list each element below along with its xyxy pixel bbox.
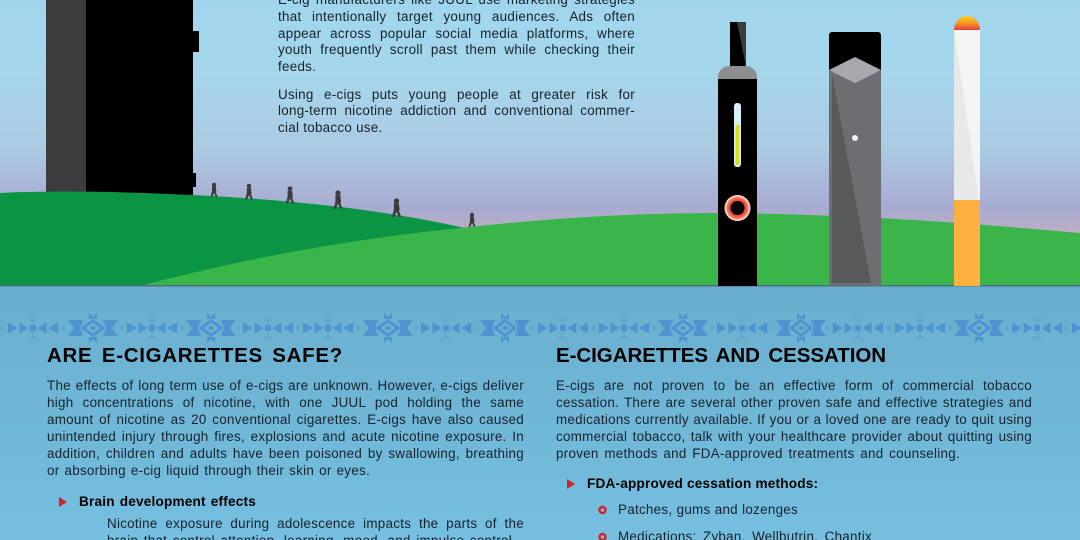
horizon line — [0, 285, 1080, 286]
text: The effects of long term use of e-cigs are unknown. However, e-cigs deliver — [47, 378, 524, 393]
list item: patches: Patches, gums and lozenges — [618, 502, 798, 517]
text: Using e-cigs puts young people at greater risk for — [278, 87, 635, 102]
decorative band pattern — [0, 313, 1080, 343]
icon: vape pen — [718, 22, 757, 286]
text: high concentrations of nicotine, with one JUUL pod holding the same — [47, 395, 524, 410]
text: addition, children and adults have been poisoned by swallowing, breathing — [47, 446, 524, 461]
tower: giant device silhouette — [46, 0, 199, 197]
heading: e-cigarettes and cessation: E-CIGARETTES AND CESSATION — [556, 344, 886, 367]
text: unintended injury through fires, explosions and acute nicotine exposure. In — [47, 429, 524, 444]
text: cial tobacco use. — [278, 120, 383, 135]
text block: marketing to youth — [278, 0, 635, 135]
bullet: patches ring — [600, 507, 606, 513]
hill: light green — [140, 213, 1080, 286]
icon: cigarette — [954, 16, 980, 286]
text: E-cigs are not proven to be an effective form of commercial tobacco — [556, 378, 1032, 393]
text: amount of nicotine as 20 conventional cigarettes. E-cigs have also caused — [47, 412, 524, 427]
text: that intentionally target young audiences. Ads often — [278, 9, 635, 24]
heading: are e-cigarettes safe: ARE E-CIGARETTES SAFE? — [47, 344, 343, 367]
walking figures — [210, 183, 476, 227]
text: proven methods and FDA-approved treatments and counseling. — [556, 446, 960, 461]
text: Nicotine exposure during adolescence impacts the parts of the — [107, 516, 524, 531]
sky — [0, 0, 1080, 240]
text: or absorbing e-cig liquid through their skin or eyes. — [47, 463, 370, 478]
lower panel background — [0, 286, 1080, 540]
text block: cessation paragraph — [556, 378, 1032, 461]
bullet: brain development arrow — [59, 497, 67, 507]
bullet: medications ring — [600, 534, 606, 540]
text: cessation. There are several other proven safe and effective strategies and — [556, 395, 1032, 410]
text block: safety paragraph — [47, 378, 524, 478]
subheading: FDA-approved cessation methods: FDA-approved cessation methods: — [587, 476, 818, 491]
text: long-term nicotine addiction and conventional commer- — [278, 103, 635, 118]
icon: JUUL pod — [829, 32, 881, 286]
hill: dark green — [0, 192, 465, 286]
text: medications currently available. If you or a loved one are ready to quit using — [556, 412, 1032, 427]
text block: brain development detail — [107, 516, 524, 540]
subheading: brain development effects: Brain development effects — [79, 494, 256, 509]
text: youth frequently scroll past them while checking their — [278, 42, 635, 57]
text: commercial tobacco, talk with your healthcare provider about quitting using — [556, 429, 1032, 444]
text: appear across popular social media platforms, where — [278, 26, 635, 41]
bullet: FDA-approved arrow — [567, 479, 575, 489]
text: feeds. — [278, 59, 316, 74]
